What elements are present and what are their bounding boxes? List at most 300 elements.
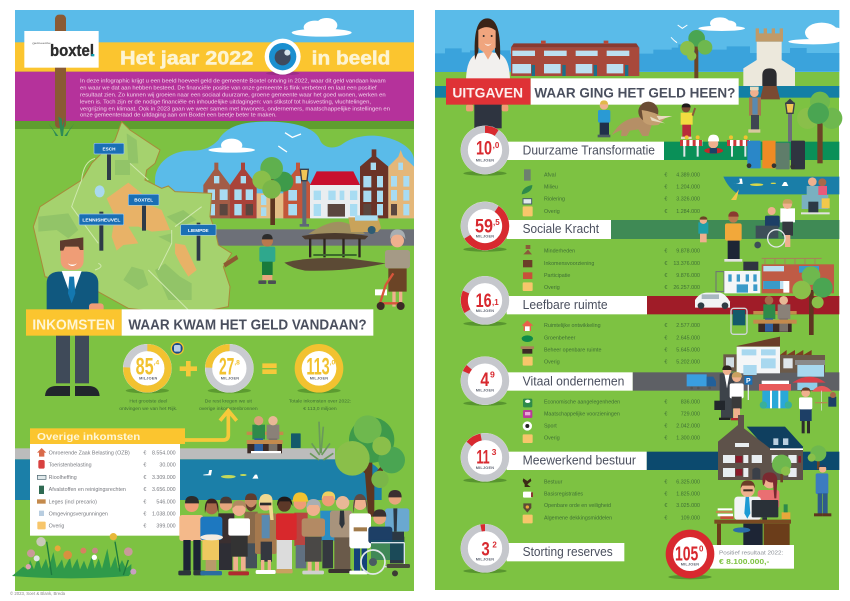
sign: ESCH: ESCH [103, 147, 116, 152]
row: Inkomensvoorziening: 13.376.000 [673, 261, 700, 267]
person: old lady with walker [375, 229, 410, 310]
row: Bestuur: Bestuur [544, 479, 563, 485]
row: Openbare orde en veiligheid [523, 503, 700, 513]
donut: 11,3 miljoen [456, 428, 514, 486]
donut: 85,4 miljoen: ,4 [154, 360, 160, 367]
panel: right page background [435, 10, 839, 590]
band label: Leefbare ruimte [523, 298, 608, 312]
books [716, 508, 734, 519]
tree [792, 266, 833, 335]
row: Minderheden: 9.878.000 [676, 249, 700, 255]
row: Beheer openbare ruimte: Beheer openbare ruimte [544, 348, 601, 354]
caption: totaal: € 113,0 miljoen [303, 406, 337, 412]
row: toeristenbelasting: € [143, 463, 146, 469]
row: Maatschappelijke voorzieningen [523, 410, 700, 418]
group of residents [178, 490, 410, 576]
caption: overige bronnen [199, 399, 258, 412]
caption: Rijk [119, 399, 177, 412]
person: man with glasses [218, 497, 234, 570]
row: Milieu [522, 185, 700, 194]
band label [507, 296, 647, 314]
tree in front of town hall [772, 455, 791, 482]
building: brick flats [762, 258, 834, 293]
row: omgevingsvergunningen [39, 511, 176, 517]
person: man's legs below banner [45, 333, 100, 396]
sign: LENNISHEUVEL [79, 212, 124, 251]
band label: Meewerkend bestuur [523, 454, 636, 468]
right page: top scene [435, 10, 843, 200]
donut: 59,5 miljoen: MILJOEN [476, 234, 494, 238]
person: woman in white top [228, 500, 250, 575]
person: grey-haired woman [302, 499, 325, 574]
houses [203, 149, 414, 218]
row: Overig: 26.257.000 [673, 285, 700, 291]
row: rioolheffing [37, 475, 176, 481]
panel: left page background [15, 10, 414, 591]
tree [680, 30, 712, 78]
row: Groenbeheer: 2.645.000 [676, 335, 700, 341]
row: Participatie: Participatie [544, 273, 570, 279]
row: Inkomensvoorziening [523, 260, 700, 267]
car [695, 293, 730, 309]
map: white roads [72, 158, 202, 310]
person: man in wheelchair and caregiver [754, 199, 795, 248]
person: child in blue [698, 216, 708, 242]
road barriers and worker [680, 135, 750, 157]
donut: 11,3 miljoen: 11 [476, 448, 490, 469]
donut: 113,0 miljoen: ,0 [330, 360, 336, 367]
street lamp [785, 99, 795, 142]
row: Basisregistraties: 1.825.000 [676, 491, 700, 497]
desk scene with two workers [714, 472, 791, 545]
dinosaur statue [612, 102, 672, 136]
person: man in blue shirt [385, 490, 409, 563]
intro text: resultaat zien. Zo kunnen wij groeien naar een sociaal duurzame, groene gemeente waar het goed wonen, werken en [80, 93, 386, 99]
donut: 85,4 miljoen: MILJOEN [139, 376, 158, 380]
person: blonde woman in blue [320, 491, 335, 568]
waste bins [747, 141, 805, 169]
row: Riolering: € [664, 197, 667, 203]
row: omgevingsvergunningen: € [143, 511, 146, 517]
row: Overig [523, 357, 700, 366]
row: omgevingsvergunningen: 1.038.000 [152, 511, 176, 517]
person: bald man in suit [328, 496, 352, 573]
icon: clouds and birds [671, 17, 843, 44]
row: Overig [523, 434, 700, 443]
band label: Sociale Kracht [523, 222, 599, 236]
row: Minderheden [523, 245, 700, 255]
skyline [435, 44, 839, 72]
row: OZB [37, 448, 176, 457]
gate building [743, 28, 795, 99]
caption: overige bronnen: overige inkomstenbronnen [199, 406, 258, 412]
bandstand [302, 233, 368, 257]
sign: LIEMPDE: LIEMPDE [188, 228, 209, 233]
heading: UITGAVEN banner [446, 78, 739, 105]
title: in beeld: in beeld [312, 48, 390, 69]
result box: positief resultaat: € 8.100.000,- [719, 559, 770, 566]
row: leges: 546.000 [156, 499, 176, 505]
tree [252, 157, 293, 225]
computer screen [752, 500, 778, 520]
person: man with cap [748, 87, 761, 133]
row: rioolheffing: € [143, 475, 146, 481]
intro text [80, 79, 390, 119]
icon: plus [180, 361, 197, 376]
row: Ruimtelijke ontwikkeling: 2.577.000 [676, 323, 700, 329]
table: overige inkomsten: Overige inkomsten [37, 432, 140, 443]
donut: 16,1 miljoen [457, 272, 513, 329]
cloud-shaped sky [155, 122, 414, 220]
grass [435, 72, 839, 87]
intro text: en waar we dat aan hebben besteed. De financiële positie van onze gemeente is flink verbeterd en laat een positief [80, 86, 377, 92]
right page: donut 10,0: MILJOEN [476, 159, 494, 163]
donut: 85,4 miljoen: 85 [136, 354, 154, 381]
reeds [310, 422, 333, 460]
row: rioolheffing: Rioolheffing [49, 475, 77, 481]
pond with ducks [723, 177, 839, 200]
row: toeristenbelasting [38, 460, 176, 469]
row: Participatie [523, 272, 700, 279]
icon: cloud [208, 139, 255, 153]
row: Bestuur: 6.325.000 [676, 479, 700, 485]
person: woman in white and navy [799, 387, 812, 433]
row: leges: Leges (incl precario) [49, 499, 97, 505]
row: Beheer openbare ruimte: € [664, 348, 667, 354]
houses: brick row [511, 41, 639, 76]
person: man with blue tie [734, 480, 761, 520]
trash bin on posts [731, 308, 747, 334]
row: Riolering [523, 197, 700, 204]
donut: 59,5 miljoen: ,5 [493, 218, 500, 227]
right page: Vitaal ondernemen section [458, 337, 839, 443]
row: Overig [523, 206, 700, 216]
person: woman with yellow helmet [293, 492, 308, 568]
right page: donut 10,0: ,0 [493, 141, 500, 150]
icon: parking sign: P [746, 378, 751, 385]
grass strip behind houses [202, 218, 414, 230]
row: Beheer openbare ruimte: 5.645.000 [676, 348, 700, 354]
person: man in blue suit [47, 237, 104, 330]
row: Minderheden: Minderheden [544, 249, 575, 255]
map: lake [95, 185, 105, 197]
river [435, 86, 839, 98]
donut: 4,9 miljoen: 9 [490, 369, 495, 379]
donut: 3,2 miljoen: 3 [481, 540, 490, 561]
person: man in peach shirt [178, 496, 205, 575]
row: overig: 399.000 [156, 523, 176, 529]
road [215, 229, 414, 246]
row: Economische aangelegenheden: € [664, 400, 667, 406]
map: built-up area Liempde [175, 243, 197, 277]
row: Overig: Overig [544, 436, 560, 442]
donut: 27,8 miljoen: MILJOEN [221, 376, 239, 380]
tree on right [808, 445, 826, 469]
row: Milieu: € [664, 185, 667, 191]
band: Vitaal ondernemen [633, 372, 839, 391]
row: Overig: Overig [544, 209, 560, 215]
row: Economische aangelegenheden: 836.000 [681, 400, 700, 406]
donut: 113,0 miljoen: MILJOEN [310, 376, 328, 380]
intro text: In deze infographic krijgt u een beeld hoeveel geld de gemeente Boxtel ontving in 2022, waar dit geld vandaan kwam [80, 79, 386, 85]
icon: eye [265, 39, 301, 75]
band label [507, 452, 647, 470]
logo: gemeente Boxtel [24, 31, 99, 68]
table: overige inkomsten [30, 428, 185, 536]
row: Economische aangelegenheden: Economische aangelegenheden [544, 400, 620, 406]
donut: 4,9 miljoen: MILJOEN [476, 388, 494, 392]
street lamp [300, 169, 309, 227]
row: Overig: 1.284.000 [676, 209, 700, 215]
row: Overig: Overig [544, 359, 560, 365]
title: Het jaar 2022: Het jaar 2022 [120, 48, 253, 69]
section: Storting reserves [507, 543, 624, 561]
sign: ESCH [94, 143, 124, 180]
flowers [12, 533, 136, 578]
heading: INKOMSTEN banner: WAAR KWAM HET GELD VANDAAN? [128, 317, 367, 333]
header: sky, title and intro [15, 10, 414, 136]
row: Milieu: 1.204.000 [676, 185, 700, 191]
family at the pond [807, 177, 827, 199]
terrace awnings and table [792, 377, 836, 411]
row: Overig: € [664, 436, 667, 442]
donut: 27,8 miljoen [205, 344, 254, 393]
band label: Duurzame Transformatie: Duurzame Transformatie [523, 143, 655, 157]
donut: 11,3 miljoen: MILJOEN [476, 466, 494, 470]
row: Sport: 2.042.000 [676, 424, 700, 430]
row: Algemene dekkingsmiddelen: 109.000 [681, 515, 700, 521]
income equation [119, 342, 351, 412]
row: Participatie: 9.876.000 [676, 273, 700, 279]
heading: INKOMSTEN banner [26, 309, 373, 336]
person: woman in white with belt [349, 494, 371, 574]
row: leges [37, 499, 176, 505]
ground mound [284, 258, 386, 271]
two men on a bench [753, 296, 797, 332]
truck [687, 374, 716, 389]
icon: parking sign [744, 376, 752, 400]
intro text: leven is. Toch zijn er de nodige financiële en inhoudelijke uitdagingen: van stikstof tot huisvesting, vluchtelingen, [80, 100, 371, 106]
building: white office [723, 337, 825, 377]
row: Algemene dekkingsmiddelen [523, 515, 700, 523]
donut: 3,2 miljoen: MILJOEN [476, 558, 494, 562]
donut: 4,9 miljoen: 4 [480, 370, 489, 391]
band: Duurzame Transformatie [664, 142, 839, 160]
icon: birds [278, 133, 301, 152]
row: Maatschappelijke voorzieningen: 729.000 [681, 412, 700, 418]
row: Bestuur: € [664, 479, 667, 485]
map of Boxtel municipality [33, 122, 232, 310]
row: Overig: € [664, 285, 667, 291]
row: Basisregistraties: Basisregistraties [544, 491, 583, 497]
icon: equals [262, 363, 277, 374]
row: Riolering: 3.326.000 [676, 197, 700, 203]
tree [797, 92, 842, 163]
right page: Meewerkend bestuur section [456, 415, 839, 545]
row: overig: € [143, 523, 146, 529]
row: Ruimtelijke ontwikkeling: € [664, 323, 667, 329]
row: Overig: 1.300.000 [676, 436, 700, 442]
band [611, 220, 839, 239]
family on bench [801, 195, 830, 214]
band label [507, 220, 611, 239]
band: Leefbare ruimte [647, 296, 839, 314]
band label [507, 372, 633, 391]
donut: 113,0 miljoen [295, 344, 343, 393]
signpost [55, 15, 66, 128]
right page: donut 10,0 [461, 126, 509, 176]
path along river [15, 448, 335, 459]
desk [714, 520, 791, 545]
row: Inkomensvoorziening: € [664, 261, 667, 267]
row: Algemene dekkingsmiddelen: € [664, 515, 667, 521]
bench with two men [247, 416, 283, 453]
donut: 59,5 miljoen: 59 [475, 217, 493, 238]
row: Inkomensvoorziening: Inkomensvoorziening [544, 261, 594, 267]
row: Overig: 5.202.000 [676, 359, 700, 365]
row: afvalstoffen [39, 486, 176, 494]
row: overig [37, 522, 176, 529]
row: Economische aangelegenheden [523, 399, 700, 407]
row: Bestuur [523, 478, 700, 487]
donut: 105,0 miljoen: 0 [699, 545, 704, 554]
trash bin [291, 433, 301, 448]
row: toeristenbelasting: 30.000 [159, 463, 176, 469]
row: Afval: Afval [544, 173, 556, 179]
row: Maatschappelijke voorzieningen: Maatschappelijke voorzieningen [544, 412, 620, 418]
person: woman behind desk [758, 472, 779, 508]
lower left: river scene and income table [12, 411, 410, 578]
row: Overig [523, 282, 700, 291]
caption: totaal [289, 399, 351, 412]
ducks and lily pads [203, 470, 258, 479]
building: white house [716, 262, 760, 293]
donut: 4,9 miljoen [458, 353, 512, 408]
row: Openbare orde en veiligheid: 3.025.000 [676, 503, 700, 509]
map: built-up area Boxtel [107, 183, 170, 251]
row: Milieu: Milieu [544, 185, 558, 191]
caption: Rijk: ontvingen we van het Rijk. [119, 406, 177, 412]
person: bearded man [244, 493, 258, 568]
row: rioolheffing: 3.309.000 [152, 475, 176, 481]
icon: cloud [292, 18, 352, 37]
result box: positief resultaat [710, 545, 794, 569]
business man and woman [714, 365, 744, 420]
row: OZB: € [143, 450, 146, 456]
donut: 27,8 miljoen: 27 [219, 354, 234, 381]
donut: 16,1 miljoen: 16 [476, 291, 492, 312]
donut: 27,8 miljoen: ,8 [234, 360, 240, 367]
row: Afval: 4.389.000 [676, 173, 700, 179]
caption: Rijk: Het grootste deel [129, 399, 167, 405]
donut: 16,1 miljoen: MILJOEN [476, 309, 494, 313]
row: Minderheden: € [664, 249, 667, 255]
sign: LENNISHEUVEL: LENNISHEUVEL [82, 217, 120, 222]
row: Groenbeheer: Groenbeheer [544, 335, 576, 341]
donut: 3,2 miljoen: 2 [492, 540, 497, 549]
row: Groenbeheer [522, 335, 700, 342]
band: Meewerkend bestuur [647, 452, 839, 470]
copyright note: © 2023, Soet & Blank, Breda [10, 591, 66, 596]
donut: 85,4 miljoen [123, 344, 172, 393]
row: Afval: € [664, 173, 667, 179]
row: leges: € [143, 499, 146, 505]
rows: Duurzame Transformatie [522, 169, 700, 216]
dark green band [15, 121, 414, 129]
row: overig: Overig [49, 523, 64, 529]
town hall [718, 415, 803, 480]
row: Openbare orde en veiligheid: Openbare orde en veiligheid [544, 503, 611, 509]
row: Riolering: Riolering [544, 197, 565, 203]
yellow title band [15, 42, 414, 72]
plant [782, 504, 790, 519]
village scene [33, 122, 414, 310]
person: woman in red [276, 497, 297, 573]
row: afvalstoffen: 3.656.000 [152, 487, 176, 493]
row: toeristenbelasting: Toeristenbelasting [49, 463, 92, 469]
donut: 11,3 miljoen: 3 [492, 447, 497, 457]
row: Algemene dekkingsmiddelen: Algemene dekkingsmiddelen [544, 515, 612, 521]
heading: UITGAVEN banner: WAAR GING HET GELD HEEN? [534, 85, 735, 101]
icon: Rijk emblem [171, 342, 184, 355]
caption: totaal: Totale inkomsten over 2022: [289, 399, 351, 405]
row: Sport: Sport [544, 424, 557, 430]
sky [435, 10, 839, 72]
row: Openbare orde en veiligheid: € [664, 503, 667, 509]
tree [335, 415, 405, 517]
intro text: vergrijzing en klimaat. Ook in 2023 gaan we weer samen met inwoners, ondernemers, maatschappelijke instellingen en [80, 106, 390, 112]
band label: Vitaal ondernemen [523, 374, 624, 388]
person: man in wheelchair [361, 509, 410, 576]
purple intro band [15, 72, 414, 121]
person: police officer [814, 464, 831, 516]
intro text: onze gemeenteraad de uitdaging aan om Boxtel een beetje beter te maken. [80, 113, 277, 119]
row: OZB: Onroerende Zaak Belasting (OZB) [49, 450, 130, 456]
sign: LIEMPDE [181, 223, 216, 261]
row: Maatschappelijke voorzieningen: € [664, 412, 667, 418]
donut: 113,0 miljoen: 113 [306, 354, 330, 381]
arrow: from table to total [185, 411, 237, 440]
person: man in orange shirt [724, 211, 742, 262]
result box: positief resultaat: Positief resultaat 2022: [719, 550, 784, 556]
donut: 105,0 miljoen [666, 530, 714, 579]
logo: gemeente Boxtel: gemeente [32, 42, 52, 45]
row: Basisregistraties: € [664, 491, 667, 497]
row: Overig: Overig [544, 285, 560, 291]
right page: donut 10,0: 10 [476, 138, 492, 159]
caption: overige bronnen: De rest kregen we uit [205, 399, 252, 405]
row: afvalstoffen: Afvalstoffen en reinigingsrechten [49, 487, 126, 493]
kiosk [759, 381, 792, 409]
logo: gemeente Boxtel: boxtel [50, 41, 94, 60]
sign: BOXTEL: BOXTEL [134, 198, 153, 203]
person: woman in blue with yellow skirt [200, 499, 223, 575]
donut: 16,1 miljoen: ,1 [492, 298, 499, 307]
donut: 105,0 miljoen: 105 [675, 542, 698, 565]
person: boy in teal shirt [258, 234, 276, 284]
donut: 3,2 miljoen [461, 524, 509, 573]
brown patch on map edge [223, 255, 238, 268]
row: omgevingsvergunningen: Omgevingsvergunningen [49, 511, 108, 517]
section: Storting reserves: Storting reserves [523, 545, 613, 559]
person: woman presenter [466, 18, 510, 128]
row: Overig: € [664, 209, 667, 215]
row: Participatie: € [664, 273, 667, 279]
person: man in blue [598, 100, 610, 137]
sign: BOXTEL [128, 194, 159, 231]
person: woman with long coat and glasses [255, 494, 277, 574]
heading: UITGAVEN banner: UITGAVEN [452, 85, 523, 101]
